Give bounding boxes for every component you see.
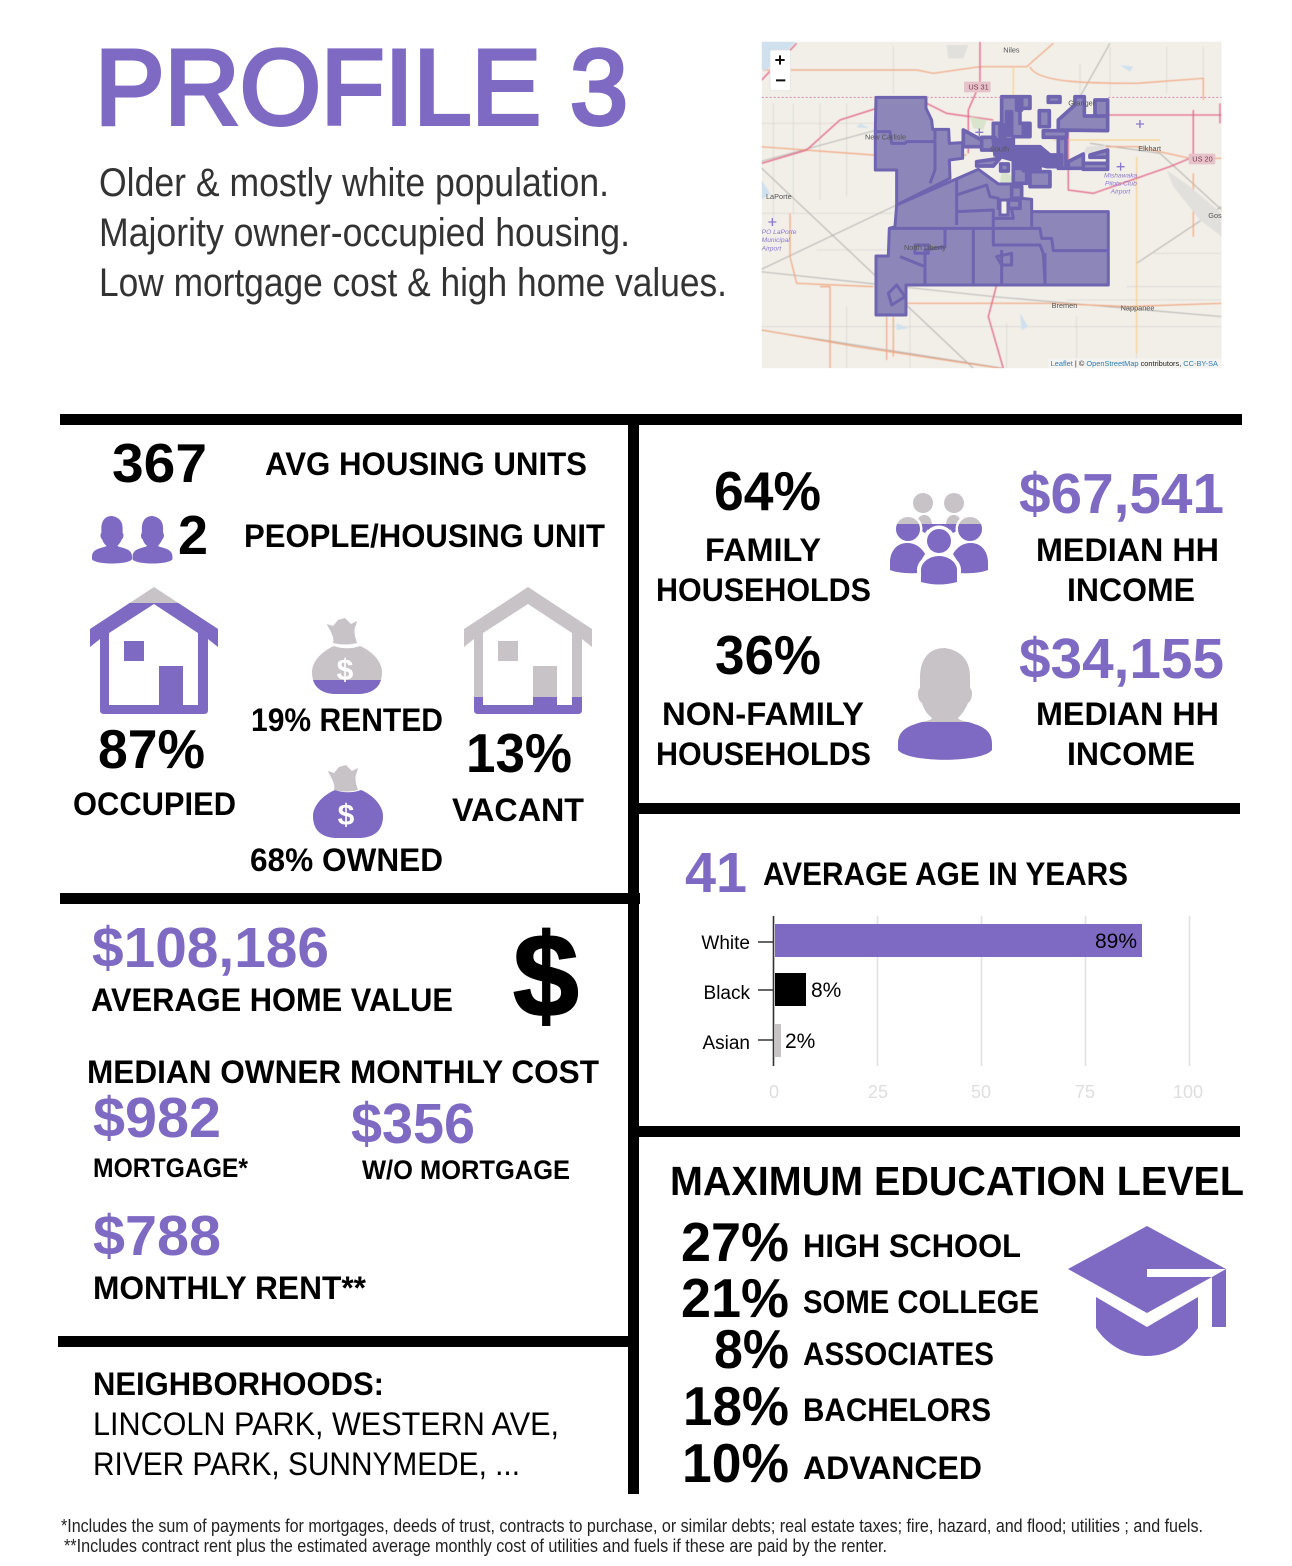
icon: money bag owned [313, 765, 383, 838]
stat: family households: FAMILY [705, 532, 821, 568]
stat: some college [681, 1267, 1039, 1329]
stat: mortgage: MORTGAGE* [93, 1153, 248, 1183]
panel: education [670, 1158, 1244, 1494]
stat: non-family households [656, 624, 871, 772]
map labels: Airport [1110, 188, 1131, 195]
bar chart: race: Asian [702, 1033, 750, 1054]
icon: money bag owned: $ [338, 799, 355, 832]
stat: non-family income: INCOME [1067, 736, 1195, 772]
stat: average housing units: 367 [112, 432, 207, 494]
stat: average age [685, 841, 1128, 905]
stat: family income [1019, 462, 1224, 608]
stat: family income: MEDIAN HH [1036, 532, 1219, 568]
title: PROFILE 3 [95, 27, 628, 147]
stat: mortgage: $982 [93, 1086, 221, 1150]
bar chart: race: 2% [785, 1030, 815, 1053]
stat: family income: $67,541 [1019, 462, 1224, 526]
stat: advanced: ADVANCED [803, 1450, 982, 1486]
bar chart: race: White [701, 933, 750, 954]
footnotes: **Includes contract rent plus the estimated average monthly cost of utilities and fuels if these are paid by the renter. [64, 1536, 887, 1556]
stat: non-family income: MEDIAN HH [1036, 696, 1219, 732]
map labels [761, 46, 1226, 313]
stat: some college: SOME COLLEGE [803, 1284, 1039, 1320]
stat: non-family income: $34,155 [1019, 627, 1224, 691]
heading: maximum education level: MAXIMUM EDUCATION LEVEL [670, 1158, 1244, 1204]
bar chart: race: 0 [769, 1082, 779, 1102]
icon: money bag rented [312, 618, 382, 694]
stat: high school [681, 1211, 1021, 1273]
stat: rented: 19% RENTED [251, 702, 443, 738]
map labels: Mishawaka [1104, 172, 1138, 179]
map labels: Elkhart [1138, 144, 1161, 153]
map labels: US 31 [968, 83, 989, 92]
stat: bachelors [683, 1375, 991, 1437]
map labels: Nappanee [1121, 304, 1154, 313]
stat: family households: 64% [714, 460, 821, 522]
map labels: Municipal [762, 237, 790, 244]
stat: associates [714, 1318, 994, 1380]
bar chart: race: 50 [971, 1082, 991, 1102]
stat: owned: 68% OWNED [250, 842, 443, 878]
stat: family households: HOUSEHOLDS [656, 572, 871, 608]
stat: average home value: $108,186 [92, 916, 329, 980]
stat: average housing units: AVG HOUSING UNITS [265, 446, 587, 482]
stat: some college: 21% [681, 1267, 789, 1329]
panel: neighborhoods: RIVER PARK, SUNNYMEDE, ... [93, 1446, 520, 1482]
map labels: Niles [1003, 46, 1020, 55]
census tract polygons [875, 97, 1108, 315]
bar chart: race: 100 [1173, 1082, 1203, 1102]
map labels: PO LaPorte [762, 229, 797, 236]
icon: occupied house [90, 587, 218, 714]
stat: associates: 8% [714, 1318, 789, 1380]
icon: vacant house [464, 587, 592, 714]
stat: occupied [73, 718, 236, 822]
stat: mortgage [93, 1086, 248, 1183]
icon: two people [92, 516, 172, 563]
text block: profile summary: Low mortgage cost & high home values. [99, 261, 727, 305]
stat: vacant: 13% [466, 722, 572, 784]
map attribution: Leaflet | © OpenStreetMap contributors, CC-BY-SA [1051, 360, 1218, 368]
stat: people per unit: 2 [178, 504, 208, 566]
stat: high school: HIGH SCHOOL [803, 1228, 1021, 1264]
map labels: Pilots Club [1105, 180, 1137, 187]
stat: advanced [682, 1432, 982, 1494]
icon: money bag rented: $ [337, 654, 354, 687]
map labels: New Carlisle [865, 132, 906, 141]
stat: monthly rent: MONTHLY RENT** [93, 1270, 367, 1306]
panel: age and race [685, 841, 1203, 1102]
panel: neighborhoods: NEIGHBORHOODS: [93, 1366, 384, 1402]
stat: average age: AVERAGE AGE IN YEARS [763, 856, 1128, 892]
stat: bachelors: 18% [683, 1375, 789, 1437]
bar chart: race: 89% [1095, 930, 1137, 953]
stat: associates: ASSOCIATES [803, 1336, 994, 1372]
stat: without mortgage: $356 [351, 1092, 475, 1156]
stat: monthly rent: $788 [93, 1204, 221, 1268]
icon: dollar sign: $ [513, 910, 579, 1042]
stat: vacant: VACANT [452, 792, 584, 828]
stat: vacant [452, 722, 584, 828]
stat: average home value: AVERAGE HOME VALUE [91, 982, 453, 1018]
stat: advanced: 10% [682, 1432, 789, 1494]
stat: without mortgage: W/O MORTGAGE [362, 1155, 570, 1185]
bar chart: race: Black [704, 983, 750, 1004]
stat: non-family households: NON-FAMILY [662, 696, 864, 732]
stat: bachelors: BACHELORS [803, 1392, 991, 1428]
map of tracts [760, 42, 1226, 368]
bar chart: race: 8% [811, 979, 841, 1002]
icon: family group [890, 493, 988, 586]
icon: single person [898, 648, 992, 760]
panel: neighborhoods [93, 1366, 559, 1482]
stat: non-family income [1019, 627, 1224, 772]
stat: family income: INCOME [1067, 572, 1195, 608]
stat: average housing units [112, 432, 587, 494]
stat: non-family households: 36% [715, 624, 821, 686]
stat: people per unit: PEOPLE/HOUSING UNIT [244, 518, 605, 554]
footnotes [61, 1516, 1203, 1556]
panel: home value and costs [87, 910, 599, 1306]
panel dividers [58, 414, 1242, 1494]
stat: family households [656, 460, 871, 608]
map labels: Gosh [1208, 211, 1226, 220]
stat: average age: 41 [685, 841, 747, 905]
stat: monthly rent [93, 1204, 367, 1306]
stat: high school: 27% [681, 1211, 789, 1273]
map controls [770, 50, 791, 91]
stat: without mortgage [351, 1092, 570, 1185]
map labels: Airport [761, 245, 782, 252]
panel: neighborhoods: LINCOLN PARK, WESTERN AVE, [93, 1406, 559, 1442]
map labels: US 20 [1192, 155, 1213, 164]
stat: non-family households: HOUSEHOLDS [656, 736, 871, 772]
text block: profile summary [99, 161, 727, 305]
heading: owner monthly cost: MEDIAN OWNER MONTHLY COST [87, 1054, 599, 1090]
bar chart: race: 25 [868, 1082, 888, 1102]
text block: profile summary: Majority owner-occupied housing. [99, 211, 630, 255]
bar chart: race: 75 [1075, 1082, 1095, 1102]
map attribution [1048, 358, 1222, 368]
text block: profile summary: Older & mostly white population. [99, 161, 609, 205]
map labels: LaPorte [766, 192, 792, 201]
map labels: South [990, 144, 1009, 153]
map labels: Granger [1068, 98, 1096, 107]
map labels: Bremen [1052, 301, 1077, 310]
icon: graduation cap [1068, 1226, 1226, 1356]
map labels: North Liberty [904, 243, 946, 252]
bar chart: race [701, 916, 1203, 1102]
panel: households [656, 460, 1224, 772]
stat: occupied: OCCUPIED [73, 786, 236, 822]
stat: occupied: 87% [98, 718, 205, 780]
panel: housing units [73, 432, 605, 878]
stat: people per unit [178, 504, 605, 566]
stat: average home value [91, 916, 453, 1018]
